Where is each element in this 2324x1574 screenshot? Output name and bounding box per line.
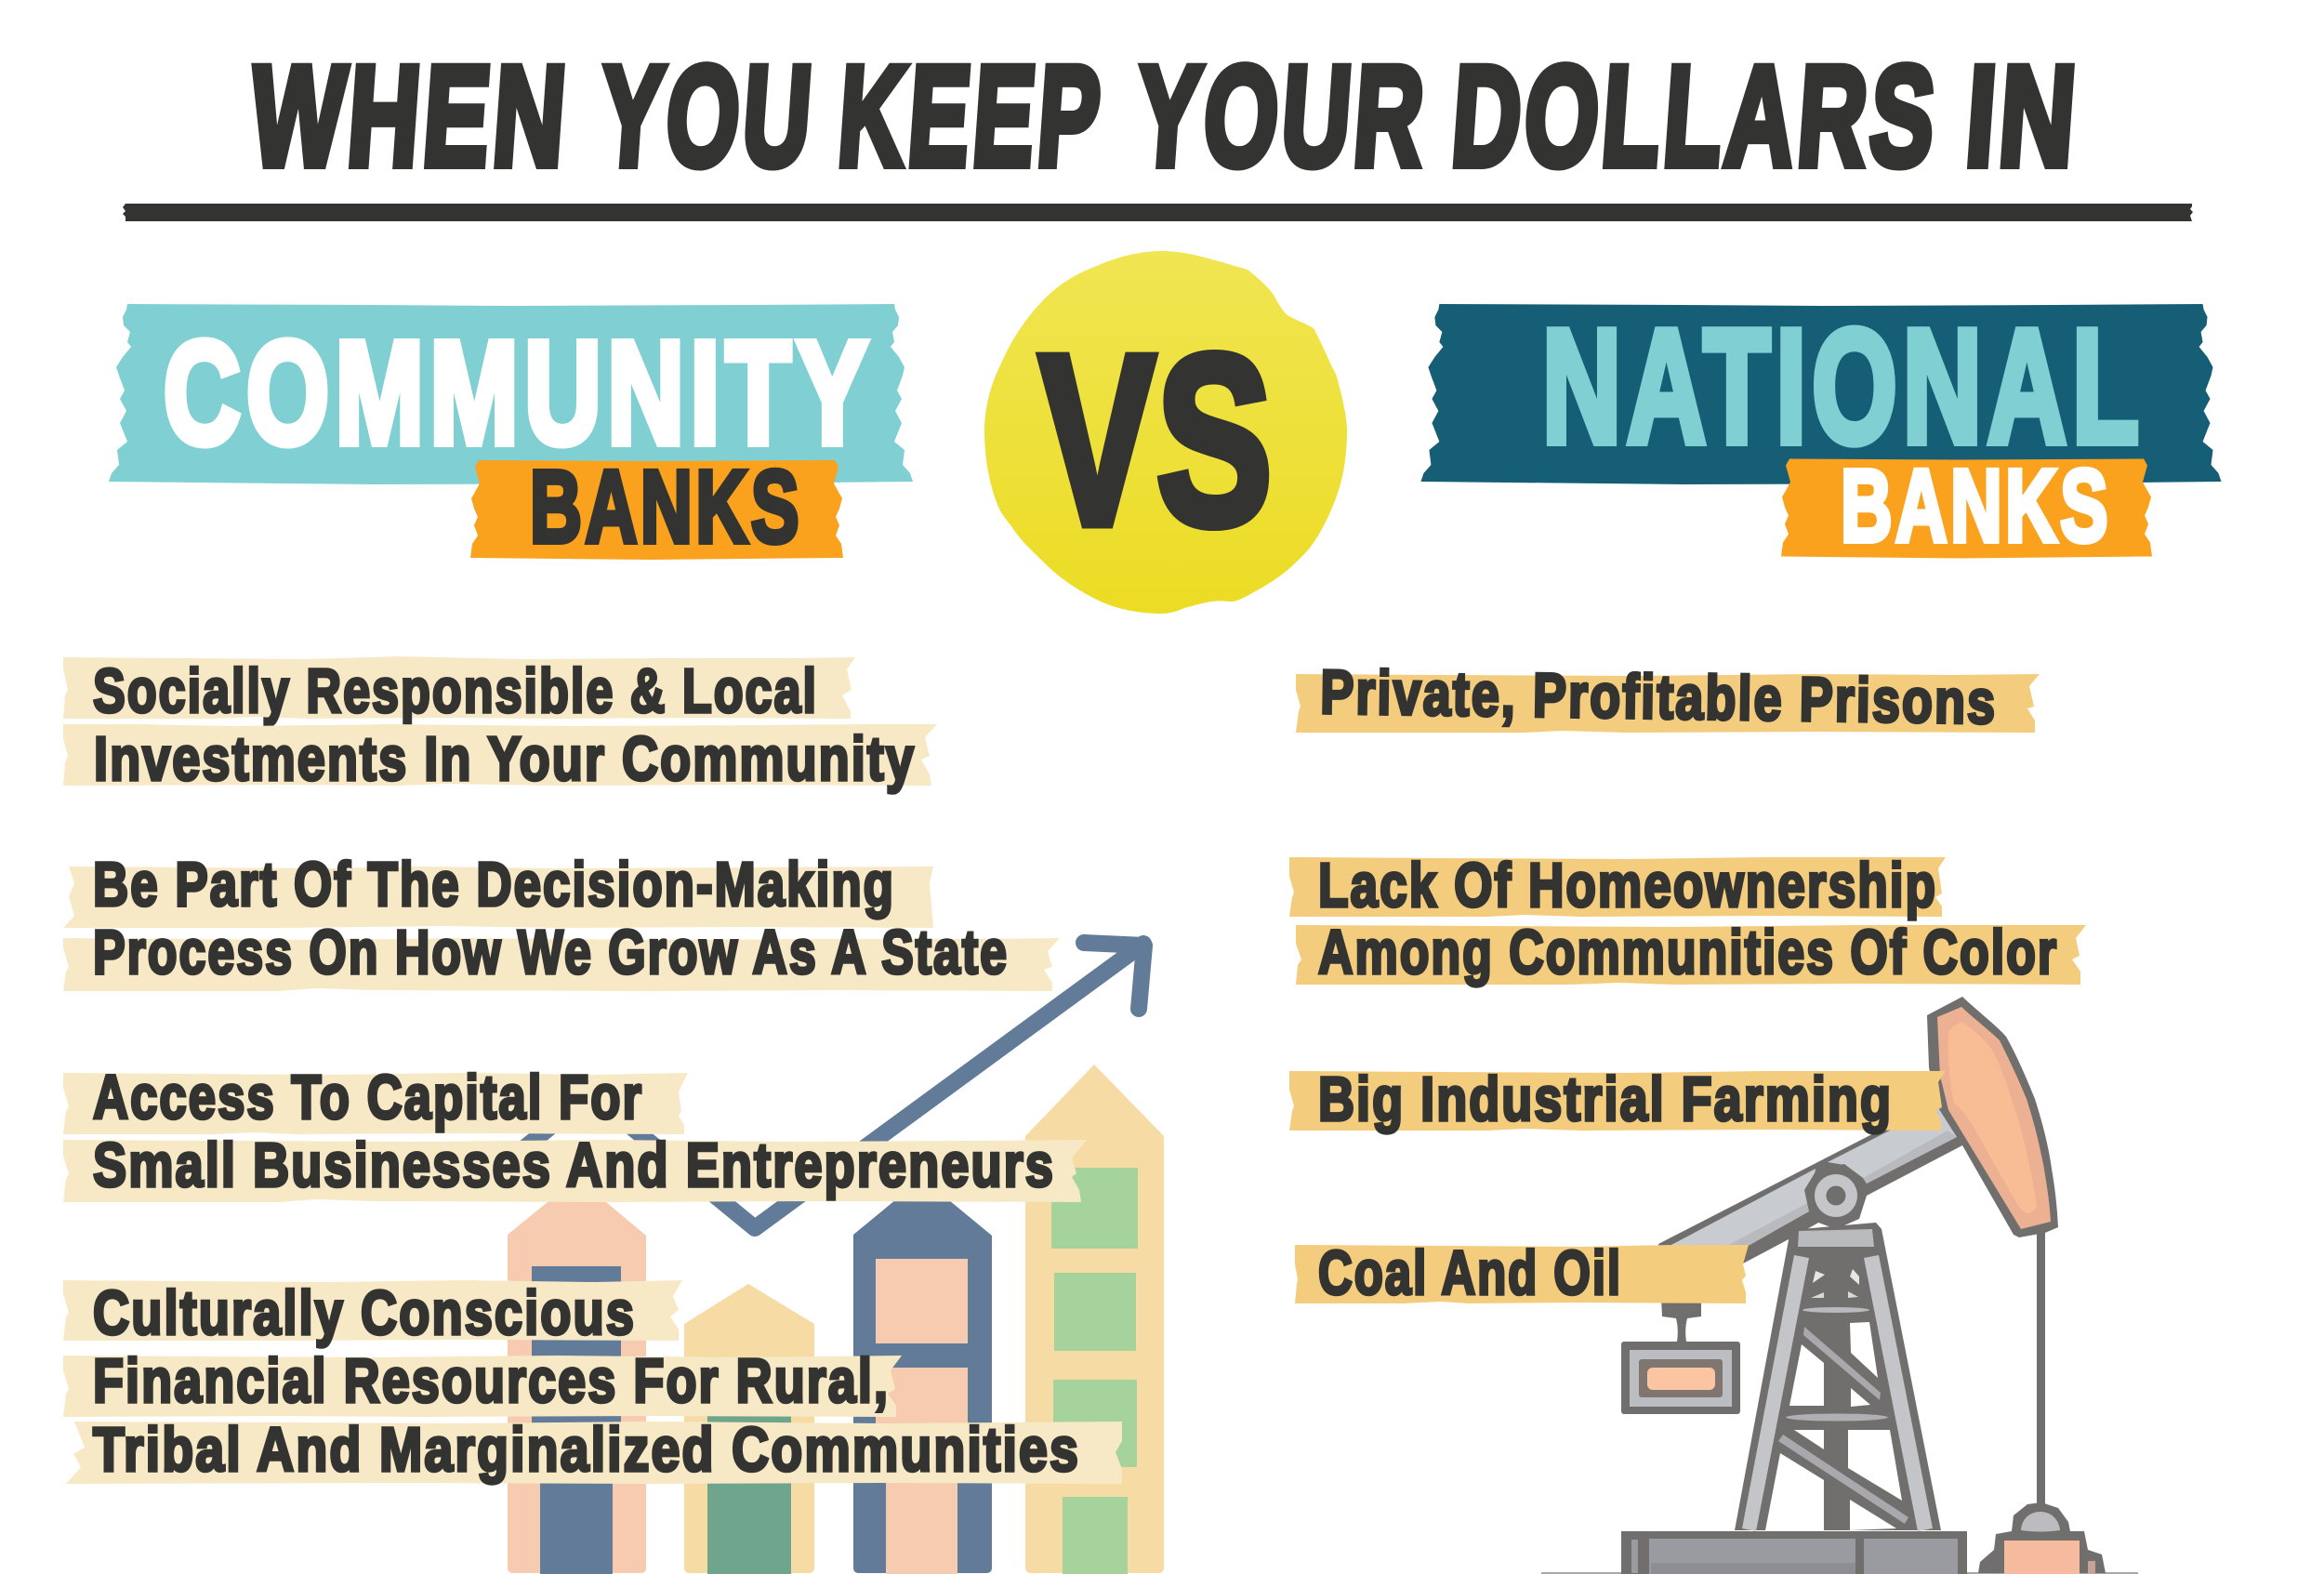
teal tape (109, 304, 913, 484)
item: homeownership: Lack Of Homeownership (1318, 851, 1937, 920)
item: socially responsible (63, 656, 937, 794)
bar 2 (684, 1284, 814, 1574)
title (245, 37, 2085, 195)
title: YOU (595, 37, 820, 195)
panel: community banks heading (109, 304, 913, 564)
hanging weight (1621, 1297, 1740, 1414)
yellow blob (984, 251, 1347, 614)
panel: national banks heading (1420, 296, 2221, 563)
item: culturally conscious (63, 1278, 1122, 1485)
tower (1735, 1223, 1941, 1531)
item: homeownership (1289, 851, 2086, 987)
title: KEEP (834, 37, 1109, 195)
item: access to capital (63, 1063, 1087, 1202)
panel: national bank investments (1289, 657, 2086, 1308)
bar 4 (1025, 1065, 1164, 1574)
item: decision making (63, 850, 1060, 991)
base (1621, 1531, 1967, 1574)
panel: VS badge (984, 251, 1347, 614)
icon: oil pump jack (1541, 997, 2138, 1574)
orange tape (1781, 459, 2152, 558)
ground line (1541, 1572, 2138, 1574)
title: WHEN (245, 37, 574, 195)
beam (1658, 1101, 1962, 1281)
horse head (1927, 997, 2058, 1237)
item: culturally conscious: Financial Resources For Rural, (93, 1346, 890, 1416)
title: YOUR (1131, 37, 1433, 195)
item: homeownership: Among Communities Of Color (1318, 918, 2058, 987)
title: DOLLARS (1447, 37, 1944, 195)
title: IN (1961, 37, 2085, 195)
item: socially responsible: Socially Responsible & Local (93, 656, 818, 726)
item: private prisons: Private, Profitable Prisons (1320, 657, 1998, 737)
item: access to capital: Access To Capital For (93, 1063, 643, 1132)
panel: community bank benefits (63, 656, 1122, 1485)
item: coal and oil: Coal And Oil (1318, 1238, 1622, 1308)
motor (1978, 1502, 2106, 1574)
VS label: VS (1039, 306, 1274, 575)
community label: COMMUNITY (164, 312, 874, 474)
item: culturally conscious: Culturally Conscious (93, 1278, 636, 1348)
chart: rising bars (493, 943, 1164, 1574)
hub (1804, 1164, 1867, 1229)
bar 3 (853, 1178, 992, 1574)
item: socially responsible: Investments In Your Community (94, 724, 916, 794)
trend arrow (493, 943, 1144, 1228)
item: culturally conscious: Tribal And Marginalized Communities (93, 1415, 1080, 1485)
item: industrial farming: Big Industrial Farming (1318, 1065, 1893, 1134)
bar 1 (508, 1178, 646, 1574)
item: access to capital: Small Businesses And Entrepreneurs (93, 1131, 1055, 1200)
title rule (123, 204, 2193, 221)
dark teal tape (1420, 304, 2221, 484)
item: decision making: Be Part Of The Decision-Making (93, 850, 895, 919)
orange tape (470, 460, 843, 560)
banks label: BANKS (1841, 449, 2111, 563)
banks label: BANKS (530, 450, 802, 564)
rod (2037, 1232, 2045, 1506)
item: decision making: Process On How We Grow As A State (93, 918, 1009, 987)
